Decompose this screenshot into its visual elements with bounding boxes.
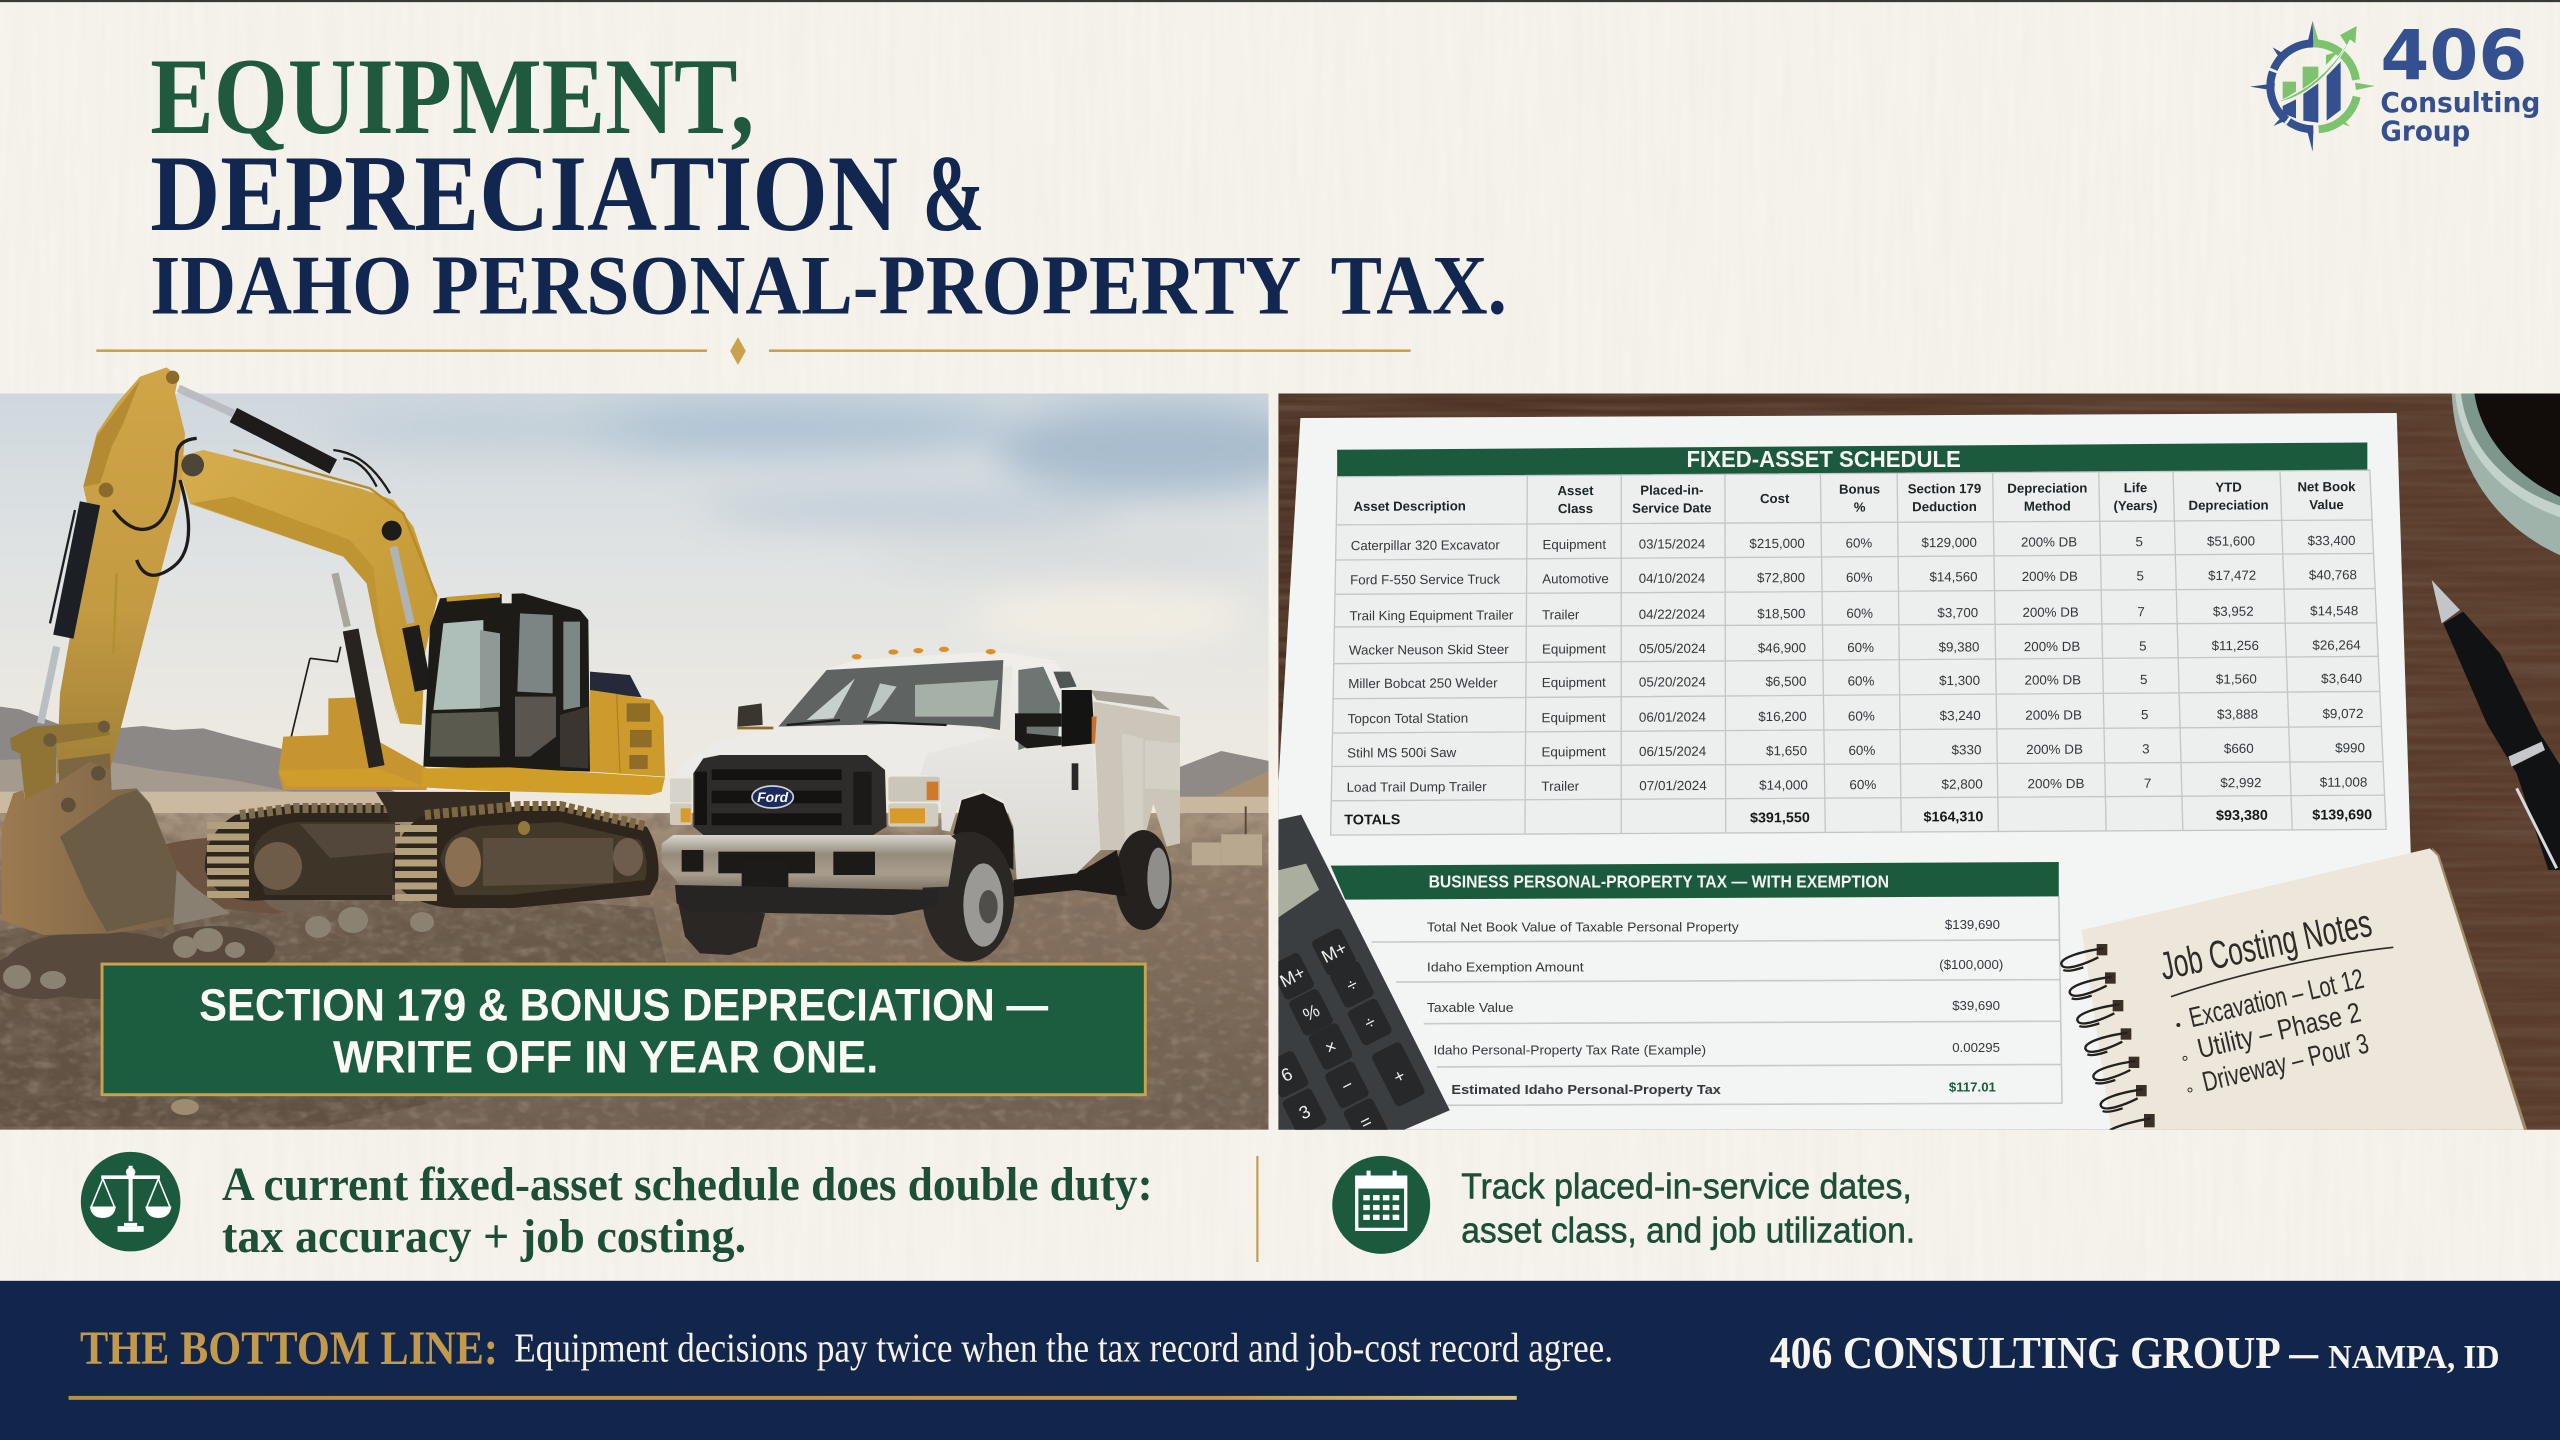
row: Load Trail Dump Trailer: 7 — [2144, 776, 2151, 791]
row: tax rate: 0.00295 — [1952, 1040, 2000, 1055]
calculator: ÷ — [1343, 974, 1361, 996]
takeaway text: track dates — [1461, 1165, 1915, 1250]
row: Trail King Equipment Trailer: 200% DB — [2022, 605, 2079, 620]
slew ring — [376, 792, 510, 822]
row: Caterpillar 320 Excavator: Equipment — [1543, 537, 1606, 552]
row: Caterpillar 320 Excavator: $33,400 — [2308, 533, 2356, 548]
row: Ford F-550 Service Truck — [1351, 570, 2356, 584]
clearance lights — [852, 647, 996, 659]
calculator: 3 — [1296, 1101, 1314, 1123]
row: Caterpillar 320 Excavator: $129,000 — [1922, 535, 1977, 550]
calculator — [1263, 815, 1450, 1147]
row: Miller Bobcat 250 Welder: $1,300 — [1939, 673, 1980, 688]
excavator stick — [57, 367, 204, 773]
row: Topcon Total Station: 5 — [2141, 707, 2148, 722]
row: Trail King Equipment Trailer: Trail King Equipment Trailer — [1350, 608, 1514, 623]
notebook list — [2176, 963, 2372, 1097]
schedule title bar — [1337, 442, 2367, 477]
front tyres — [678, 832, 1014, 962]
table header: Section 179 — [1908, 481, 1981, 496]
row: taxable value: $39,690 — [1952, 998, 2000, 1013]
excavator deck — [422, 767, 665, 795]
calculator: M+ — [1277, 962, 1308, 991]
calculator: + — [1390, 1065, 1409, 1088]
row: Ford F-550 Service Truck: Automotive — [1542, 571, 1609, 586]
row: net book value: $139,690 — [1945, 917, 2000, 932]
notebook heading — [2156, 901, 2393, 997]
truck grille and Ford badge — [693, 755, 887, 835]
row: Load Trail Dump Trailer: Load Trail Dump Trailer — [1347, 779, 1487, 795]
truck underside — [1013, 850, 1127, 897]
calculator: % — [1300, 1000, 1323, 1025]
row: Wacker Neuson Skid Steer: $26,264 — [2312, 637, 2361, 653]
row: Topcon Total Station: Equipment — [1542, 710, 1606, 725]
logo: 406 Consulting Group — [2250, 16, 2540, 152]
row: Miller Bobcat 250 Welder: 5 — [2140, 672, 2148, 687]
row: Wacker Neuson Skid Steer: $11,256 — [2212, 638, 2259, 653]
row: Topcon Total Station: 06/01/2024 — [1639, 709, 1707, 725]
truck utility body — [1090, 690, 1180, 850]
row: Topcon Total Station: $9,072 — [2322, 706, 2363, 721]
row: Caterpillar 320 Excavator: Caterpillar 320 Excavator — [1351, 537, 1500, 553]
table header: Life — [2124, 480, 2147, 495]
notebook list: Utility – Phase 2 — [2194, 996, 2364, 1064]
dirt mound behind bucket — [166, 838, 283, 914]
row: Wacker Neuson Skid Steer: Equipment — [1542, 641, 1606, 657]
row: Trail King Equipment Trailer: $18,500 — [1757, 606, 1805, 621]
table header: Cost — [1760, 491, 1790, 506]
logo: 406 Consulting Group: 406 — [2380, 16, 2527, 96]
row: Topcon Total Station: $3,240 — [1940, 708, 1981, 723]
pen — [2432, 580, 2560, 870]
row: Stihl MS 500i Saw: $1,650 — [1766, 743, 1807, 758]
row: Miller Bobcat 250 Welder — [1349, 673, 2362, 690]
row: Caterpillar 320 Excavator: 03/15/2024 — [1639, 536, 1705, 552]
row: totals: $391,550 — [1750, 810, 1810, 826]
row: Stihl MS 500i Saw: 200% DB — [2026, 742, 2083, 757]
title — [150, 36, 1507, 332]
calculator: = — [1357, 1111, 1375, 1133]
takeaway text: double duty: A current fixed-asset schedule does double duty: — [222, 1159, 1153, 1211]
row: Wacker Neuson Skid Steer — [1349, 640, 2360, 656]
vertical divider — [1256, 1156, 1258, 1262]
table: fixed-asset schedule — [1331, 442, 2386, 835]
logo mark: compass and growth chart — [2250, 21, 2375, 152]
row: Stihl MS 500i Saw: $990 — [2335, 740, 2365, 755]
job costing notebook — [2061, 847, 2528, 1133]
takeaway text: double duty: tax accuracy + job costing. — [222, 1211, 746, 1263]
excavator engine housing — [590, 672, 665, 777]
row: Wacker Neuson Skid Steer: $46,900 — [1758, 640, 1806, 655]
row: Load Trail Dump Trailer: $11,008 — [2320, 775, 2367, 790]
row: Stihl MS 500i Saw: Stihl MS 500i Saw — [1347, 745, 1457, 760]
calculator: × — [1322, 1036, 1340, 1058]
takeaway text: track dates: Track placed-in-service dates, — [1461, 1165, 1912, 1206]
row: Caterpillar 320 Excavator: 5 — [2136, 534, 2143, 549]
excavator tracks — [205, 792, 659, 908]
rear wheel — [1115, 830, 1172, 930]
truck door and fender — [920, 662, 1101, 879]
row: Ford F-550 Service Truck: $17,472 — [2208, 568, 2256, 583]
row: Caterpillar 320 Excavator: 200% DB — [2021, 534, 2077, 550]
panel: equipment photo scene — [0, 367, 1322, 1130]
row: Wacker Neuson Skid Steer: $9,380 — [1939, 639, 1979, 655]
footer band — [0, 1281, 2560, 1440]
row: Ford F-550 Service Truck: $40,768 — [2309, 567, 2357, 582]
row: Load Trail Dump Trailer: $14,000 — [1759, 778, 1808, 793]
row: Ford F-550 Service Truck: 60% — [1846, 570, 1873, 585]
row: Load Trail Dump Trailer: $2,800 — [1941, 777, 1983, 792]
logo: 406 Consulting Group: Group — [2380, 114, 2470, 147]
firm name and location: 406 CONSULTING GROUP — [1770, 1327, 2281, 1378]
row: tax rate: Idaho Personal-Property Tax Rate (Example) — [1433, 1043, 1706, 1058]
row: Trail King Equipment Trailer: 60% — [1846, 606, 1873, 621]
row: Stihl MS 500i Saw: $660 — [2224, 741, 2254, 756]
tax table body — [1339, 895, 2062, 1107]
calculator: − — [1338, 1074, 1356, 1097]
title: IDAHO PERSONAL-PROPERTY — [150, 238, 1301, 332]
title: & — [922, 133, 984, 254]
row: Stihl MS 500i Saw: 06/15/2024 — [1639, 744, 1707, 759]
table header: Class — [1558, 501, 1593, 516]
row: totals: TOTALS — [1344, 812, 1400, 828]
row: net book value: Total Net Book Value of Taxable Personal Property — [1427, 919, 1739, 934]
title divider with diamond — [96, 337, 1411, 365]
panel: desk with fixed-asset paperwork — [1263, 390, 2560, 1147]
row: estimated tax: Estimated Idaho Personal-Property Tax — [1451, 1082, 1722, 1097]
table grid — [1331, 470, 2386, 835]
table header: Asset Description — [1353, 498, 1466, 514]
row: Ford F-550 Service Truck: $72,800 — [1757, 570, 1805, 585]
banner: section 179 callout: WRITE OFF IN YEAR ONE. — [333, 1032, 878, 1083]
row: Load Trail Dump Trailer: 07/01/2024 — [1639, 778, 1707, 793]
banner: section 179 callout — [102, 964, 1145, 1095]
row: Load Trail Dump Trailer — [1348, 777, 2367, 794]
calculator: M+ — [1318, 938, 1350, 967]
notebook heading: Job Costing Notes — [2156, 901, 2376, 989]
row: Stihl MS 500i Saw: 3 — [2142, 741, 2150, 756]
excavator boom — [180, 450, 437, 767]
row: Miller Bobcat 250 Welder: Equipment — [1542, 675, 1606, 690]
row: Trail King Equipment Trailer: $3,700 — [1937, 605, 1978, 620]
row: Trail King Equipment Trailer — [1350, 606, 2358, 623]
row: Wacker Neuson Skid Steer: 05/05/2024 — [1639, 641, 1706, 656]
row: estimated tax — [1451, 1079, 1996, 1097]
row: Ford F-550 Service Truck: $14,560 — [1929, 569, 1978, 584]
coffee mug — [2452, 390, 2560, 557]
table header: Method — [2024, 498, 2071, 514]
row: exemption: Idaho Exemption Amount — [1427, 959, 1584, 974]
excavator hydraulics — [41, 388, 333, 723]
paper sheet — [1278, 413, 2420, 1130]
row: Wacker Neuson Skid Steer: 60% — [1847, 640, 1874, 655]
row: totals: $164,310 — [1924, 809, 1983, 825]
table header — [1354, 482, 2356, 514]
row: Miller Bobcat 250 Welder: 05/20/2024 — [1639, 674, 1706, 690]
excavator — [2, 367, 665, 935]
banner: section 179 callout: SECTION 179 & BONUS DEPRECIATION — — [199, 979, 1048, 1030]
row: Ford F-550 Service Truck: 5 — [2136, 568, 2144, 583]
truck hood — [675, 723, 993, 777]
table header: Service Date — [1632, 500, 1712, 516]
bottom line statement: Equipment decisions pay twice when the tax record and job-cost record agree. — [514, 1326, 1613, 1371]
truck roof and windshield — [778, 652, 1060, 730]
row: Trail King Equipment Trailer: $14,548 — [2310, 603, 2358, 618]
row: Load Trail Dump Trailer: $2,992 — [2220, 775, 2261, 790]
excavator cab — [423, 593, 590, 772]
rear track — [205, 805, 400, 901]
windshield wipers — [787, 720, 947, 725]
row: Stihl MS 500i Saw — [1348, 742, 2364, 760]
side mirrors — [737, 690, 1097, 748]
row: exemption: ($100,000) — [1939, 957, 2003, 972]
takeaway text: track dates: asset class, and job utilization. — [1461, 1209, 1915, 1250]
row: Trail King Equipment Trailer: $3,952 — [2213, 604, 2254, 619]
headlights — [670, 777, 940, 827]
excavator bucket — [2, 762, 230, 935]
row: Load Trail Dump Trailer: Trailer — [1541, 779, 1580, 794]
row: tax rate — [1433, 1040, 2000, 1058]
firm name and location: NAMPA, ID — [2328, 1338, 2500, 1376]
row: taxable value — [1427, 998, 2000, 1015]
title: DEPRECIATION — [150, 133, 898, 254]
table header: Net Book — [2298, 479, 2356, 494]
row: Wacker Neuson Skid Steer: 200% DB — [2024, 639, 2080, 654]
takeaway text: double duty — [222, 1159, 1153, 1263]
takeaway strip — [81, 1152, 1915, 1263]
row: estimated tax: $117.01 — [1949, 1079, 1996, 1094]
row: Topcon Total Station: 60% — [1848, 709, 1875, 724]
table header: Placed-in- — [1640, 482, 1703, 498]
row: Ford F-550 Service Truck: 200% DB — [2022, 569, 2078, 584]
table header: Deduction — [1912, 499, 1977, 514]
row: Ford F-550 Service Truck: 04/10/2024 — [1639, 571, 1705, 586]
row: Topcon Total Station: $3,888 — [2217, 707, 2258, 722]
icon: scales of justice — [81, 1152, 180, 1251]
rocks in foreground — [0, 900, 434, 1115]
calculator: ÷ — [1361, 1011, 1379, 1034]
row: Topcon Total Station — [1348, 708, 2363, 726]
table header: Asset — [1558, 483, 1594, 498]
notebook list: Driveway – Pour 3 — [2199, 1028, 2372, 1097]
row: Stihl MS 500i Saw: Equipment — [1541, 744, 1606, 759]
table header: (Years) — [2113, 498, 2158, 513]
row: totals — [1344, 809, 2372, 824]
table: business personal-property tax — [1331, 862, 2062, 1107]
tax table heading: BUSINESS PERSONAL-PROPERTY TAX — WITH EXEMPTION — [1429, 871, 1889, 891]
wood desk — [1278, 393, 2560, 1130]
tax table heading — [1331, 862, 2059, 900]
row: Topcon Total Station: $16,200 — [1758, 709, 1807, 724]
rear body, rail and counterweight — [278, 647, 427, 790]
row: Ford F-550 Service Truck: Ford F-550 Service Truck — [1350, 572, 1500, 587]
row: Stihl MS 500i Saw: $330 — [1952, 742, 1981, 757]
row: Wacker Neuson Skid Steer: 5 — [2139, 639, 2147, 654]
table header: Value — [2309, 497, 2344, 512]
icon: calendar — [1332, 1156, 1430, 1254]
table header: Depreciation — [2007, 480, 2087, 496]
bottom line statement — [80, 1323, 1613, 1375]
bumper — [662, 835, 956, 890]
calculator: 6 — [1278, 1064, 1296, 1086]
row: Topcon Total Station: Topcon Total Station — [1348, 711, 1468, 726]
notebook spiral — [2061, 944, 2155, 1130]
title: TAX. — [1331, 238, 1507, 332]
row: totals: $139,690 — [2312, 807, 2372, 823]
table header: Depreciation — [2189, 497, 2269, 513]
row: exemption — [1427, 957, 2003, 974]
row: Caterpillar 320 Excavator: $51,600 — [2207, 533, 2255, 549]
row: Trail King Equipment Trailer: 04/22/2024 — [1639, 607, 1705, 622]
row: net book value — [1427, 917, 2000, 934]
row: Caterpillar 320 Excavator: 60% — [1846, 535, 1872, 551]
gold underline — [69, 1396, 1517, 1400]
table header: YTD — [2215, 480, 2242, 495]
title: EQUIPMENT, — [150, 36, 754, 157]
row: Wacker Neuson Skid Steer: Wacker Neuson Skid Steer — [1349, 642, 1509, 658]
row: Miller Bobcat 250 Welder: $3,640 — [2321, 671, 2362, 686]
row: Miller Bobcat 250 Welder: 200% DB — [2025, 672, 2081, 688]
row: totals: $93,380 — [2216, 808, 2268, 824]
service truck — [662, 647, 1180, 962]
row: Caterpillar 320 Excavator: $215,000 — [1749, 536, 1805, 551]
row: Caterpillar 320 Excavator — [1351, 535, 2355, 553]
row: Trail King Equipment Trailer: 7 — [2137, 604, 2145, 619]
row: taxable value: Taxable Value — [1427, 1000, 1513, 1015]
excavator bucket linkage — [10, 721, 112, 815]
valance — [675, 885, 938, 915]
row: Miller Bobcat 250 Welder: $1,560 — [2216, 672, 2257, 687]
table header: % — [1854, 500, 1866, 515]
row: Miller Bobcat 250 Welder: 60% — [1848, 673, 1875, 689]
truck grille and Ford badge: Ford — [757, 789, 789, 805]
sky and ground backdrop — [0, 393, 1322, 1130]
front track — [392, 806, 659, 908]
table header: Bonus — [1839, 482, 1880, 497]
logo: 406 Consulting Group: Consulting — [2380, 86, 2540, 119]
row: Trail King Equipment Trailer: Trailer — [1542, 607, 1580, 622]
row: Topcon Total Station: 200% DB — [2025, 708, 2082, 723]
schedule title bar: FIXED-ASSET SCHEDULE — [1687, 446, 1961, 472]
row: Stihl MS 500i Saw: 60% — [1848, 743, 1876, 758]
bottom line statement: THE BOTTOM LINE: — [80, 1323, 498, 1375]
row: Load Trail Dump Trailer: 60% — [1849, 777, 1876, 792]
row: Miller Bobcat 250 Welder: $6,500 — [1765, 674, 1806, 689]
notebook list: Excavation – Lot 12 — [2186, 963, 2367, 1033]
row: Load Trail Dump Trailer: 200% DB — [2028, 776, 2085, 791]
row: Miller Bobcat 250 Welder: Miller Bobcat 250 Welder — [1348, 675, 1498, 691]
